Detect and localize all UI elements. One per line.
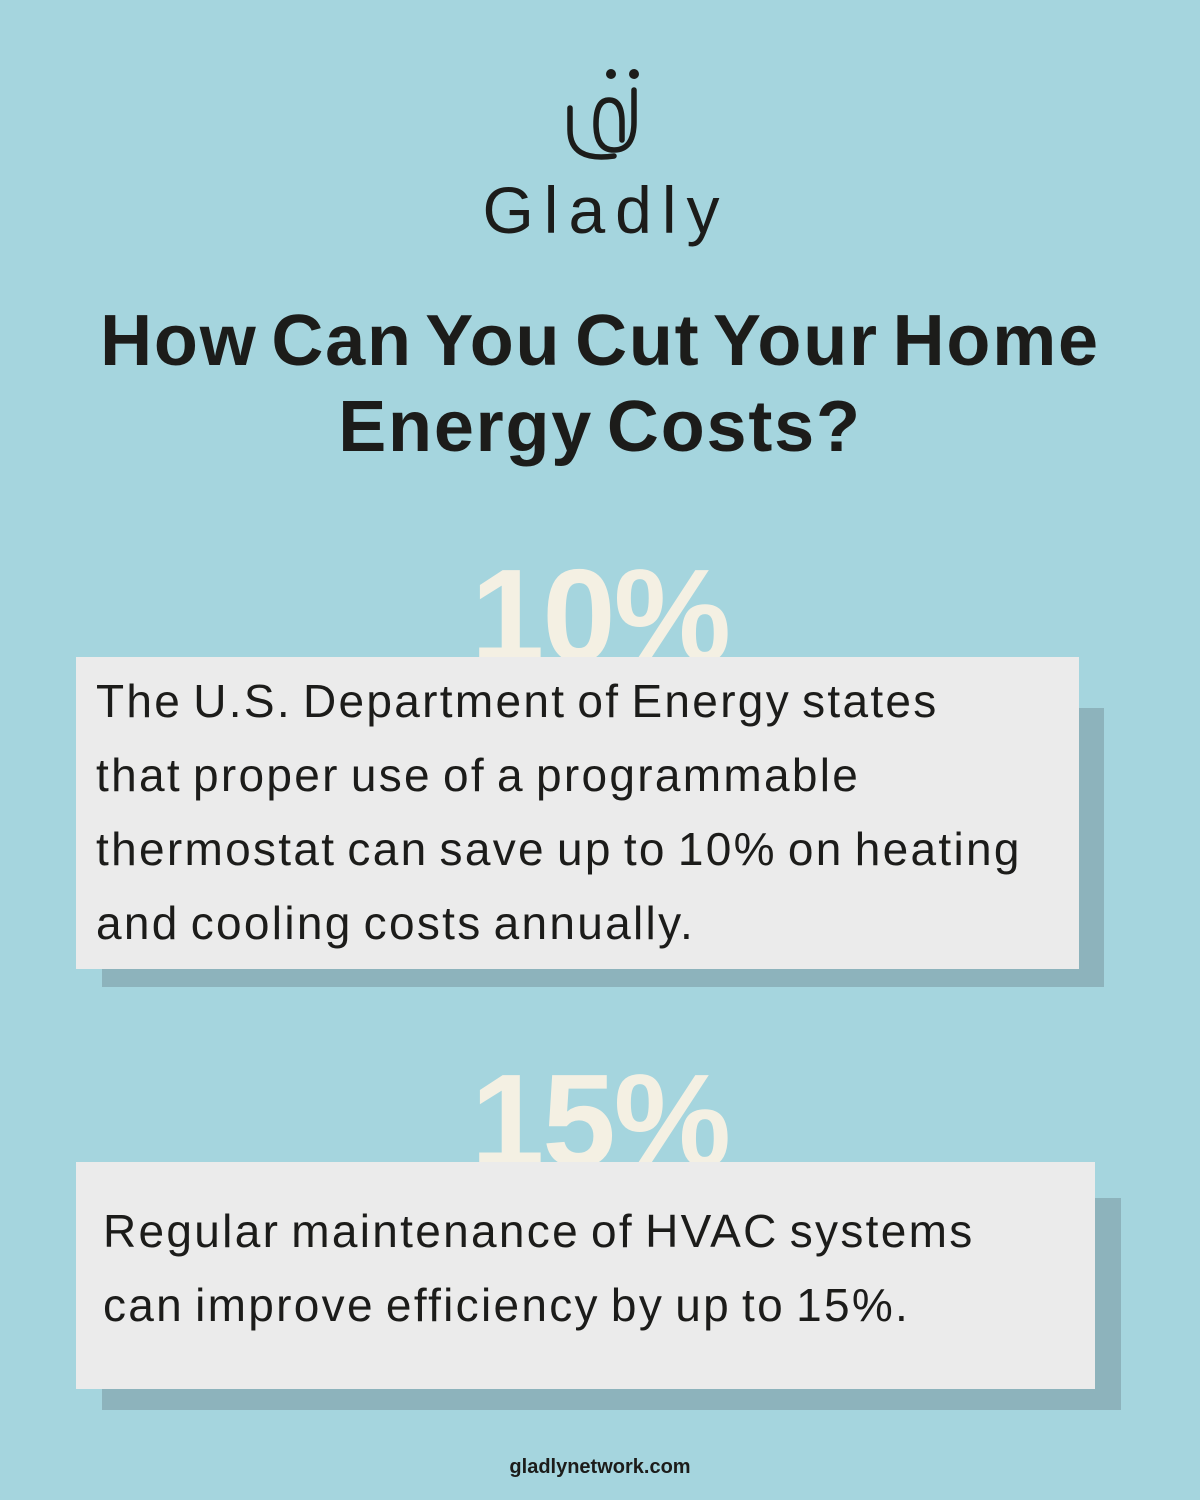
title [100, 301, 1100, 467]
title: How Can You Cut Your Home [100, 301, 1100, 381]
stat number 10%: 10% [471, 542, 729, 689]
card 1 text: The U.S. Department of Energy states [96, 675, 939, 727]
card shadow 1 [102, 708, 1104, 987]
stat number 15%: 15% [471, 1047, 729, 1194]
card 1 text: thermostat can save up to 10% on heating [96, 823, 1022, 875]
footer url: gladlynetwork.com [509, 1456, 691, 1478]
card 2 text: can improve efficiency by up to 15%. [103, 1279, 910, 1331]
card shadow 2 [102, 1198, 1121, 1410]
card 1 text: that proper use of a programmable [96, 749, 860, 801]
card 1 text [96, 675, 1022, 949]
title: Energy Costs? [338, 387, 862, 467]
card 2 text: Regular maintenance of HVAC systems [103, 1205, 975, 1257]
logo icon [567, 69, 639, 160]
card 2 [76, 1162, 1095, 1389]
card 2 text [103, 1205, 975, 1331]
card 1 [76, 657, 1079, 969]
card 1 text: and cooling costs annually. [96, 897, 695, 949]
logo wordmark: Gladly [482, 173, 730, 247]
